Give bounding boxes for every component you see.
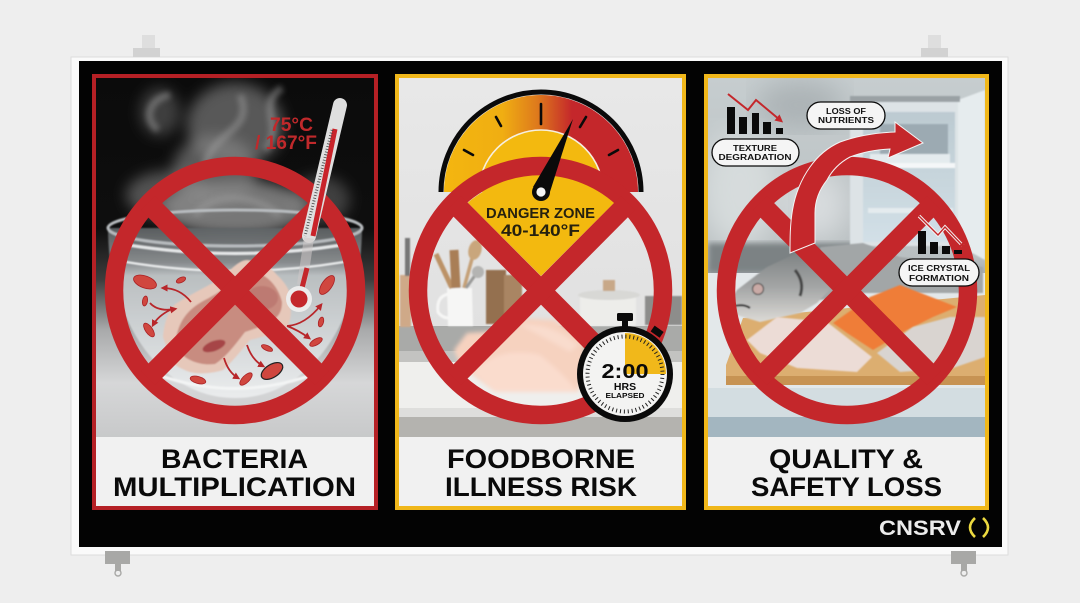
clip: top left bbox=[133, 35, 160, 57]
steam bbox=[126, 83, 350, 236]
caption bbox=[708, 437, 985, 506]
prohibition sign bbox=[418, 166, 663, 415]
label: texture degradation: DEGRADATION bbox=[718, 152, 792, 162]
caption: BACTERIA bbox=[161, 444, 308, 474]
label: loss of nutrients: LOSS OF bbox=[826, 106, 866, 116]
glass bowl bbox=[108, 210, 362, 398]
curved arrow bbox=[790, 122, 923, 253]
panel: quality and safety loss bbox=[700, 76, 987, 508]
temperature gauge bbox=[438, 90, 644, 192]
prohibition sign bbox=[114, 166, 356, 415]
stopwatch bbox=[577, 313, 673, 422]
danger zone label bbox=[486, 206, 595, 240]
photo: steaming bowl bbox=[96, 78, 374, 437]
caption: ILLNESS RISK bbox=[445, 472, 638, 502]
temperature label: / 167°F bbox=[255, 133, 317, 154]
caption: QUALITY & bbox=[769, 444, 923, 474]
danger zone wedge bbox=[468, 176, 614, 276]
icon: texture chart bbox=[727, 94, 783, 134]
clip: bottom left bbox=[105, 551, 130, 576]
caption: MULTIPLICATION bbox=[113, 472, 356, 502]
clip: bottom right bbox=[951, 551, 976, 576]
utensils and crock bbox=[400, 238, 522, 327]
infographic poster bbox=[70, 35, 1008, 577]
stopwatch: 2:00 bbox=[602, 361, 648, 383]
danger zone label: DANGER ZONE bbox=[486, 206, 595, 222]
stopwatch: HRS bbox=[614, 381, 636, 393]
temperature label bbox=[255, 115, 317, 154]
counter bbox=[399, 326, 682, 351]
poster paper bbox=[71, 57, 1008, 555]
whole fish bbox=[730, 243, 983, 322]
icon: ice crystal chart bbox=[918, 216, 963, 254]
brand logo bbox=[879, 517, 988, 540]
open freezer bbox=[850, 90, 985, 260]
label: loss of nutrients bbox=[807, 102, 885, 129]
raw chicken bbox=[454, 318, 585, 392]
panel border bbox=[397, 76, 684, 508]
photo: freezer and fish bbox=[700, 78, 985, 437]
bacteria bbox=[132, 272, 337, 387]
thermometer bbox=[286, 105, 340, 312]
growth arrows bbox=[150, 288, 321, 378]
caption: SAFETY LOSS bbox=[751, 472, 942, 502]
white fillets bbox=[747, 317, 985, 372]
cooking pot bbox=[578, 280, 682, 326]
caption bbox=[399, 437, 682, 506]
caption bbox=[96, 437, 374, 506]
danger zone label: 40-140°F bbox=[501, 221, 580, 240]
caption: FOODBORNE bbox=[447, 444, 635, 474]
gauge needle bbox=[532, 119, 573, 201]
photo: kitchen with chicken bbox=[399, 78, 682, 437]
salmon fillet bbox=[833, 285, 957, 350]
label: ice crystal formation bbox=[899, 259, 979, 286]
prohibition sign bbox=[726, 166, 968, 415]
label: ice crystal formation: FORMATION bbox=[909, 273, 969, 283]
label: loss of nutrients: NUTRIENTS bbox=[818, 115, 874, 125]
panel border bbox=[94, 76, 376, 508]
clip: top right bbox=[921, 35, 948, 57]
black poster board bbox=[79, 61, 1002, 547]
temperature label: 75°C bbox=[270, 115, 313, 136]
label: texture degradation bbox=[712, 139, 799, 166]
cutting board bbox=[726, 295, 985, 385]
panel: bacteria multiplication bbox=[94, 76, 376, 508]
marble counter bbox=[708, 273, 985, 388]
panel border bbox=[706, 76, 987, 508]
brand logo: CNSRV bbox=[879, 517, 961, 540]
meat bbox=[163, 260, 291, 373]
stopwatch: ELAPSED bbox=[606, 393, 644, 400]
label: texture degradation: TEXTURE bbox=[733, 143, 777, 153]
label: ice crystal formation: ICE CRYSTAL bbox=[908, 263, 970, 273]
panel: foodborne illness risk bbox=[397, 76, 684, 508]
